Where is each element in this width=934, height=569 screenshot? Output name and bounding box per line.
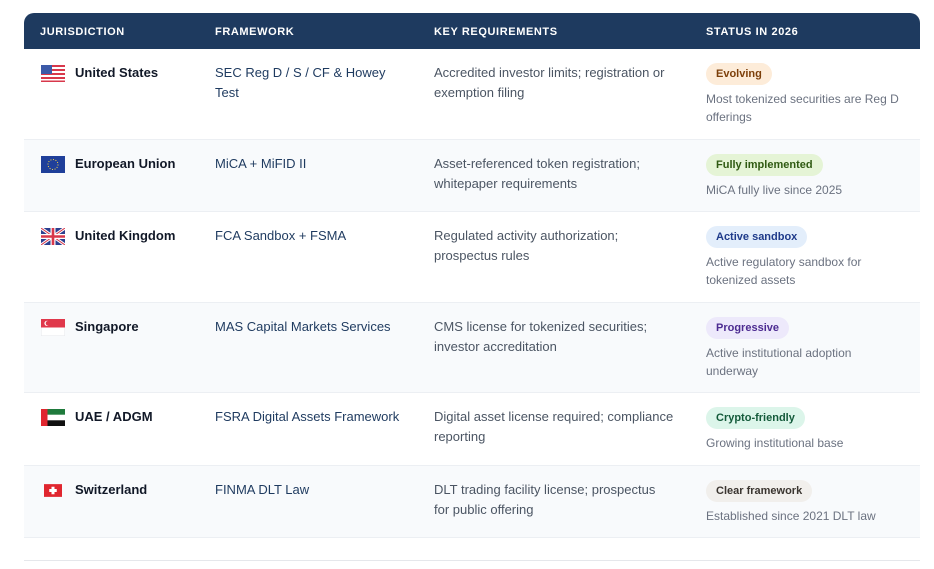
icon: Singapore flag <box>41 319 65 336</box>
table header <box>24 13 920 49</box>
row: UAE / ADGM: Digital asset license required; compliance reporting <box>434 409 673 444</box>
row: Singapore: Singapore <box>75 319 139 334</box>
table header: STATUS IN 2026 <box>706 26 798 38</box>
row: United Kingdom: Active sandbox <box>716 231 797 243</box>
row: United States: Evolving <box>716 68 762 80</box>
row: Singapore: Active institutional adoption underway <box>706 346 851 378</box>
row: European Union: Fully implemented <box>716 159 813 171</box>
row: Switzerland: FINMA DLT Law <box>215 482 309 497</box>
row: Singapore <box>24 303 920 393</box>
table header: KEY REQUIREMENTS <box>434 26 558 38</box>
row: European Union <box>24 140 920 212</box>
row: United Kingdom <box>24 212 920 303</box>
row: United Kingdom: United Kingdom <box>75 228 175 243</box>
icon: Swiss flag <box>44 484 62 497</box>
row: United Kingdom: FCA Sandbox + FSMA <box>215 228 346 243</box>
row: United States: Most tokenized securities are Reg D offerings <box>706 92 899 124</box>
row: Switzerland: DLT trading facility license; prospectus <box>434 482 655 497</box>
row: European Union: MiCA fully live since 2025 <box>706 183 842 197</box>
row: United States <box>24 49 920 140</box>
row: Switzerland: for public offering <box>434 502 534 516</box>
row: UAE / ADGM <box>24 393 920 466</box>
table header: JURISDICTION <box>40 26 125 38</box>
row: Switzerland: Switzerland <box>75 482 147 497</box>
row: UAE / ADGM: UAE / ADGM <box>75 409 153 424</box>
row: UAE / ADGM: Crypto-friendly <box>716 412 795 424</box>
row: European Union: MiCA + MiFID II <box>215 156 306 171</box>
row: European Union: Asset-referenced token registration; whitepaper requirements <box>434 156 640 190</box>
row: Switzerland: Clear framework <box>716 485 802 497</box>
row: Singapore: Progressive <box>716 322 779 334</box>
row: United States: Accredited investor limits; registration or exemption filing <box>434 65 664 100</box>
row: United States: United States <box>75 65 158 80</box>
row: UAE / ADGM: FSRA Digital Assets Framework <box>215 409 399 424</box>
row: Switzerland: Established since 2021 DLT law <box>706 509 876 523</box>
row: Switzerland <box>24 466 920 538</box>
icon: UAE flag <box>41 409 65 426</box>
icon: UK flag <box>41 228 65 245</box>
row: UAE / ADGM: Growing institutional base <box>706 436 843 450</box>
row: European Union: European Union <box>75 156 175 171</box>
row: Singapore: MAS Capital Markets Services <box>215 319 391 334</box>
row: United Kingdom: Active regulatory sandbox for tokenized assets <box>706 255 861 287</box>
icon: EU flag <box>41 156 65 173</box>
row: United States: SEC Reg D / S / CF & Howey Test <box>215 65 386 100</box>
row: Singapore: CMS license for tokenized securities; investor accreditation <box>434 319 647 354</box>
row: United Kingdom: Regulated activity authorization; prospectus rules <box>434 228 618 262</box>
icon: US flag <box>41 65 65 82</box>
table header: FRAMEWORK <box>215 26 294 38</box>
